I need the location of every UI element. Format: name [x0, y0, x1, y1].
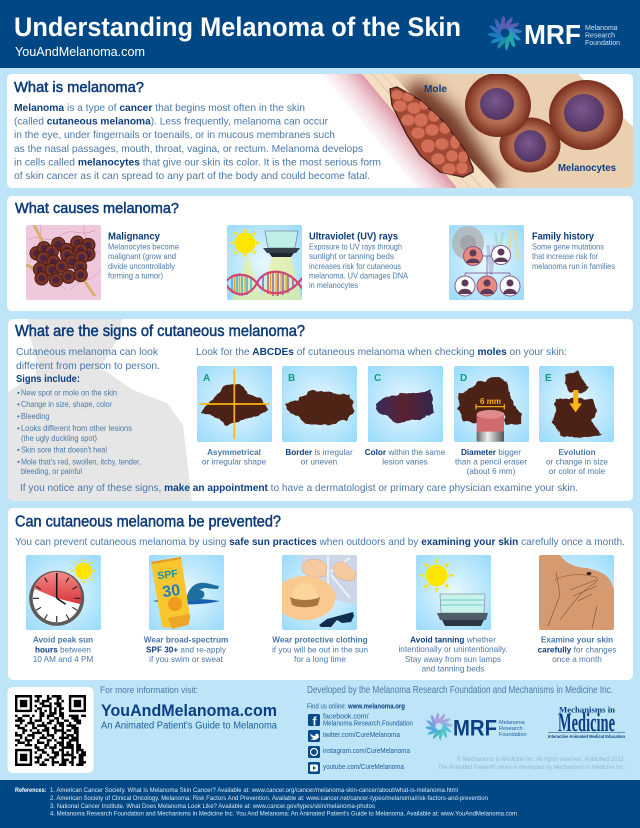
body text: of skin cancer as it can spread to any part of the body and could become fatal. — [14, 171, 370, 182]
caption: examine: Examine your skin — [541, 636, 613, 645]
Mechanisms in Medicine logo: Mechanisms in — [559, 705, 615, 715]
label: melanocytes: Melanocytes — [558, 163, 616, 174]
intro text: different from person to person. — [16, 361, 160, 372]
caption: sunscreen: Wear broad-spectrum — [144, 636, 228, 645]
tile D: diameter — [454, 366, 529, 442]
MRF logo: Research — [585, 32, 615, 40]
MRF logo: MRF — [524, 19, 581, 50]
caption C: lesion varies — [382, 458, 428, 467]
footer: references: 1. American Cancer Society. What Is Melanoma Skin Cancer? Available at: www.cancer.org/cancer/melanoma-skin-cancer/about/what-is-melanoma.html — [50, 787, 458, 794]
text: ultraviolet rays: in melanocytes — [309, 281, 358, 290]
list of signs: • — [17, 458, 20, 467]
MRF logo: Melanoma — [585, 25, 618, 32]
heading: What causes melanoma? — [15, 200, 179, 217]
list of signs: • — [17, 446, 20, 455]
heading: What is melanoma? — [14, 79, 144, 96]
icon: malignancy tumor — [26, 225, 101, 300]
caption: examine — [538, 636, 616, 664]
caption: sunscreen: if you swim or sweat — [149, 655, 224, 664]
caption C: Color within the same — [365, 448, 446, 457]
body text: in the eye, under fingernails or toenails, or in mucous membranes such — [14, 130, 335, 141]
caption D: than a pencil eraser — [455, 458, 527, 467]
tile B: border — [282, 366, 357, 442]
body text: as the nasal passages, mouth, throat, vagina, or rectum. Melanoma develops — [14, 144, 363, 155]
list of signs: • — [17, 400, 20, 409]
icon: sun and tanning bed — [416, 555, 491, 630]
background silhouette — [8, 319, 192, 502]
intro text — [16, 347, 160, 385]
find us online: Find us online: www.melanoma.org — [307, 704, 405, 711]
text: family history: Some gene mutations — [532, 242, 604, 252]
footer: references: References: — [15, 787, 46, 794]
footer: references — [0, 780, 640, 828]
intro text: Signs include: — [16, 374, 80, 385]
body text: Melanoma is a type of cancer that begins most often in the skin — [14, 103, 305, 114]
caption B: or uneven — [301, 458, 338, 467]
list of signs: Mole that's red, swollen, itchy, tender, — [21, 458, 141, 467]
list of signs: • — [17, 388, 20, 397]
caption A: Asymmetrical — [207, 448, 261, 457]
caption E: or color of mole — [549, 467, 606, 476]
illustration: mole and melanocytes — [322, 73, 633, 192]
label: mole: Mole — [424, 84, 447, 95]
tagline: An Animated Patient's Guide to Melanoma — [101, 721, 277, 732]
icon: sunscreen and swimmer — [149, 555, 224, 630]
caption B — [285, 448, 353, 467]
caption: examine: once a month — [552, 655, 602, 664]
tile B: border: B — [288, 373, 295, 384]
text: malignancy — [108, 232, 179, 280]
heading: Can cutaneous melanoma be prevented? — [15, 514, 281, 531]
panel: signs of cutaneous melanoma — [8, 319, 633, 502]
caption: peak sun: Avoid peak sun — [33, 636, 93, 645]
icon: examining skin — [539, 555, 615, 630]
icon: youtube — [308, 762, 320, 774]
tile A: asymmetrical — [197, 366, 272, 442]
caption E — [546, 448, 608, 476]
caption: sunscreen: SPF 30+ and re-apply — [146, 646, 227, 655]
tile A: asymmetrical: A — [203, 373, 210, 384]
text: family history: Family history — [532, 232, 594, 242]
caption: clothing: for a long time — [294, 655, 346, 664]
caption: tanning — [398, 636, 508, 674]
website: YouAndMelanoma.com — [101, 701, 277, 720]
panel: more information — [8, 685, 625, 774]
caption: sunscreen — [144, 636, 228, 664]
caption: peak sun — [33, 636, 93, 664]
text: ultraviolet rays: melanoma. UV damages DNA — [309, 272, 408, 280]
intro text: Cutaneous melanoma can look — [16, 347, 159, 358]
heading: What are the signs of cutaneous melanoma? — [15, 323, 305, 340]
tile D: diameter: D — [460, 373, 467, 384]
caption: clothing — [272, 636, 368, 664]
copyright — [438, 756, 625, 771]
icon: hat, shirt and sunglasses — [274, 555, 357, 630]
caption D — [455, 448, 527, 476]
caption: tanning: Avoid tanning whether — [410, 636, 496, 645]
icon: facebook: f — [312, 714, 318, 728]
icon: UV rays — [225, 225, 305, 300]
list of signs: Bleeding — [21, 412, 50, 421]
text: malignancy: Malignancy — [108, 232, 160, 242]
list of signs: Skin sore that doesn't heal — [21, 446, 107, 455]
title: Understanding Melanoma of the Skin — [14, 12, 461, 42]
Mechanisms in Medicine logo — [548, 705, 625, 739]
text: malignancy: forming a tumor) — [108, 272, 163, 280]
footer: references: 3. National Cancer Institute. What Does Melanoma Look Like? Available at: www.cancer.gov/types/skin/melanoma-photos — [50, 803, 375, 810]
caption: clothing: Wear protective clothing — [272, 636, 368, 645]
text: ultraviolet rays: increases risk for cutaneous — [309, 262, 401, 271]
MRF logo, footer: Foundation — [499, 732, 527, 738]
MRF logo, footer: Melanoma — [499, 720, 526, 726]
list of signs: bleeding, or painful — [21, 467, 82, 476]
caption D: (about 6 mm) — [467, 467, 516, 476]
caption: tanning: and tanning beds — [422, 664, 484, 674]
icon: sunscreen and swimmer: 30 — [161, 582, 181, 601]
footer: references: 4. Melanoma Research Foundation and Mechanisms in Medicine Inc. You And Melanoma: An Animated Patient's Guide to Melanoma. Available at: www.YouAndMelanoma.com — [50, 810, 517, 818]
icon: facebook — [308, 714, 320, 728]
tile E: evolution: E — [545, 373, 552, 384]
list of signs: New spot or mole on the skin — [21, 388, 117, 397]
icon: family tree — [449, 225, 524, 300]
MRF logo, footer: Research — [499, 726, 523, 732]
text: ultraviolet rays — [309, 232, 408, 290]
icon: sunscreen and swimmer: SPF — [157, 568, 179, 582]
tile C: color — [368, 366, 443, 442]
visit text: For more information visit: — [100, 685, 198, 696]
Mechanisms in Medicine logo: Interactive Animated Medical Education — [548, 734, 625, 739]
ABCDE intro: Look for the ABCDEs of cutaneous melanoma when checking moles on your skin: — [196, 347, 567, 358]
header banner — [0, 0, 640, 68]
caption A: or irregular shape — [202, 458, 267, 467]
panel: what is melanoma — [7, 73, 633, 192]
caption E: or change in size — [546, 458, 608, 467]
text: ultraviolet rays: sunlight or tanning beds — [309, 252, 394, 261]
facebook link: Melanoma.Research.Foundation — [323, 720, 413, 728]
body text: (called cutaneous melanoma). Less frequently, melanoma can occur — [14, 116, 329, 128]
MRF logo — [487, 15, 620, 51]
text: ultraviolet rays: Exposure to UV rays through — [309, 242, 402, 252]
footer: references: 2. American Society of Clinical Oncology. Melanoma: Risk Factors And Prevention. Available at: www.cancer.net/cancer-types/melanoma/risk-factors-and-prevention — [50, 795, 489, 802]
text: family history: that increase risk for — [532, 252, 598, 261]
caption: peak sun: hours between — [35, 646, 91, 655]
text: ultraviolet rays: Ultraviolet (UV) rays — [309, 232, 398, 242]
caption: examine: carefully for changes — [538, 646, 616, 655]
caption D: Diameter bigger — [461, 448, 521, 457]
MRF logo, footer — [425, 712, 527, 741]
text: malignancy: malignant (grow and — [108, 252, 176, 261]
facebook link — [323, 714, 413, 728]
list of signs: Change in size, shape, color — [21, 400, 112, 409]
text: malignancy: divide uncontrollably — [108, 262, 176, 271]
text: family history: melanoma run in families — [532, 262, 615, 271]
call to action: If you notice any of these signs, make an appointment to have a dermatologist or primary care physician examine your skin. — [20, 483, 578, 494]
facebook link: facebook.com/ — [323, 714, 369, 721]
intro text: You can prevent cutaneous melanoma by using safe sun practices when outdoors and by examining your skin carefully once a month. — [15, 537, 625, 548]
youtube link: youtube.com/CureMelanoma — [323, 764, 404, 771]
icon: clock and sun — [26, 555, 101, 630]
body text: in cells called melanocytes that give our skin its color. It is the most serious form — [14, 158, 381, 168]
list of signs: (the ugly duckling spot) — [21, 434, 97, 443]
list of signs: • — [17, 424, 20, 433]
caption: clothing: if you will be out in the sun — [272, 646, 368, 655]
MRF logo: Foundation — [585, 40, 620, 47]
caption E: Evolution — [558, 448, 596, 457]
caption A — [202, 448, 267, 467]
MRF logo, footer: MRF — [453, 716, 497, 740]
copyright: The Animated Patient® series is developed by Mechanisms in Medicine Inc. — [438, 764, 625, 771]
icon: twitter — [308, 730, 320, 742]
panel: what causes melanoma — [7, 196, 633, 311]
caption: peak sun: 10 AM and 4 PM — [33, 655, 93, 664]
tile D: diameter: 6 mm — [480, 397, 501, 406]
copyright: © Mechanisms in Medicine Inc. All rights reserved. Published 2023. — [457, 756, 625, 763]
caption: tanning: intentionally or unintentionally. — [398, 645, 508, 654]
instagram link: instagram.com/CureMelanoma — [323, 748, 410, 755]
list of signs: • — [17, 412, 20, 421]
QR code — [8, 687, 94, 773]
caption B: Border is irregular — [285, 448, 353, 457]
twitter link: twitter.com/CureMelanoma — [323, 732, 400, 739]
tile E: evolution — [539, 366, 614, 442]
text: malignancy: Melanocytes become — [108, 242, 179, 252]
body text — [14, 103, 381, 182]
caption: tanning: Stay away from sun lamps — [405, 655, 501, 664]
list of signs — [17, 388, 141, 476]
icon: instagram — [308, 746, 320, 758]
text: family history — [532, 232, 615, 271]
list of signs: Looks different from other lesions — [21, 424, 132, 433]
tile C: color: C — [374, 373, 381, 384]
caption C — [365, 448, 446, 467]
panel: prevention — [8, 508, 633, 680]
website: YouAndMelanoma.com — [15, 44, 145, 59]
